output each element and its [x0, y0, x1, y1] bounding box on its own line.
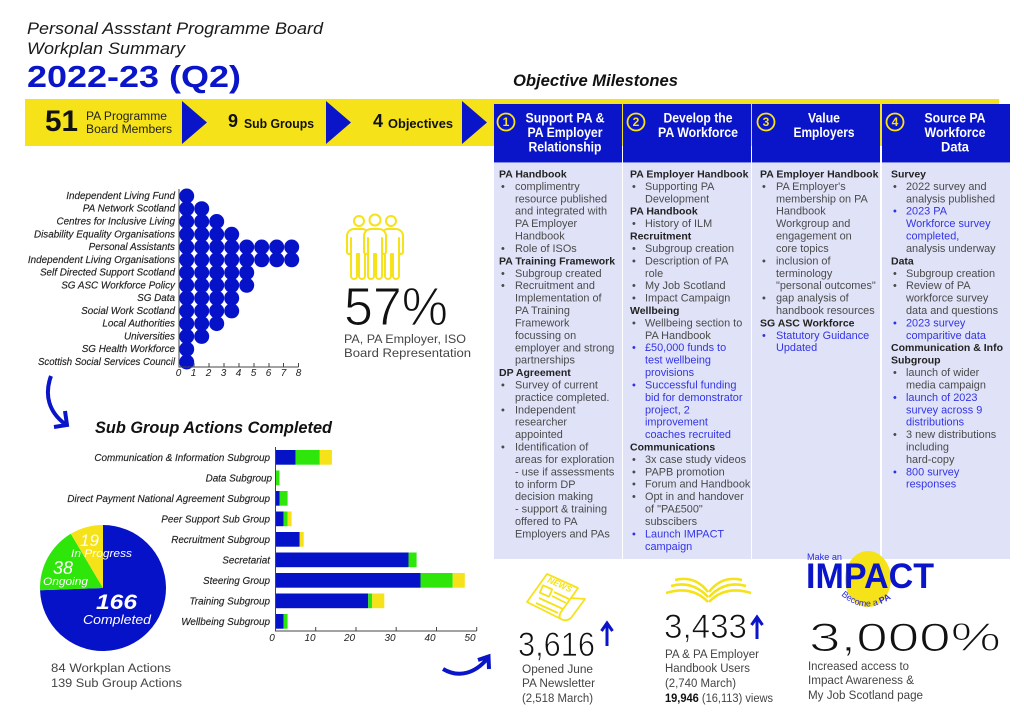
column 4 communication and info subgroup: hard-copy — [906, 454, 955, 466]
column 3 PA Employer Handbook: Workgroup and — [776, 218, 850, 230]
column 2 communications: • — [632, 454, 636, 466]
column 4 data: Data — [891, 255, 914, 267]
column 2 communications: • — [632, 491, 636, 503]
column 4 communication and info subgroup: Subgroup — [891, 355, 941, 367]
column 2 wellbeing: test wellbeing — [645, 355, 711, 367]
arrow: members to sub groups — [182, 101, 207, 144]
column 4 data: • — [893, 317, 897, 329]
dot chart axis: 3 — [221, 368, 227, 379]
column 2 handbooks and recruitment: Supporting PA — [645, 181, 715, 193]
column 3 PA Employer Handbook: • — [762, 293, 766, 305]
arrow: newsletter increase — [602, 623, 612, 646]
column 4 survey: Survey — [891, 168, 926, 180]
logo: make an impact: Become a PA — [842, 590, 891, 607]
column 4: source PA workforce data — [882, 104, 1010, 559]
column 2 handbooks and recruitment: role — [645, 268, 663, 280]
column 1 PA Training Framework: partnerships — [515, 355, 575, 367]
column 3 PA Employer Handbook: handbook resources — [776, 305, 875, 317]
icon: open book — [666, 579, 751, 602]
column 2 handbooks and recruitment: Recruitment — [630, 231, 692, 243]
column 2 wellbeing: Wellbeing section to — [645, 317, 742, 329]
objective milestones heading: Objective Milestones — [513, 72, 678, 90]
column 1 DP Agreement: offered to PA — [515, 516, 578, 528]
dot chart axis: 7 — [281, 368, 287, 379]
newsletter stat: Opened June — [522, 662, 593, 676]
column 2 communications: • — [632, 479, 636, 491]
column 2 handbooks and recruitment: Impact Campaign — [645, 293, 730, 305]
column 3 SG ASC Workforce: Updated — [776, 342, 817, 354]
column 4 data: Review of PA — [906, 280, 971, 292]
column 2 wellbeing: • — [632, 317, 636, 329]
board representation stat: 57% — [344, 277, 448, 337]
column 3 PA Employer Handbook: Handbook — [776, 206, 826, 218]
column 1 DP Agreement: practice completed. — [515, 392, 609, 404]
bar chart labels: Data Subgroup — [206, 473, 273, 484]
ongoing bars — [276, 450, 453, 629]
dot chart labels: Centres for Inclusive Living — [56, 216, 175, 228]
column 4 survey: 2023 PA — [906, 206, 948, 218]
board representation stat — [344, 277, 471, 360]
sub group actions heading: Sub Group Actions Completed — [95, 419, 333, 437]
column 2 header: 2 — [633, 115, 640, 129]
objectives stat: Objectives — [388, 116, 453, 131]
column 3 SG ASC Workforce: • — [762, 330, 766, 342]
dot chart labels: Personal Assistants — [89, 242, 175, 253]
board members stat — [45, 105, 172, 138]
column 2 handbooks and recruitment: • — [632, 243, 636, 255]
column 1 header: PA Employer — [528, 125, 603, 140]
impact stat: My Job Scotland page — [808, 688, 923, 702]
column 2 handbooks and recruitment: Development — [645, 193, 709, 205]
column 3 SG ASC Workforce: Statutory Guidance — [776, 330, 869, 342]
column 3: value employers — [752, 104, 880, 559]
bar chart labels: Wellbeing Subgroup — [181, 617, 270, 628]
column 3 PA Employer Handbook: inclusion of — [776, 255, 831, 267]
column 1 DP Agreement: Independent — [515, 404, 576, 416]
column 1 PA Training Framework: Recruitment and — [515, 280, 595, 292]
column 3 PA Employer Handbook: "personal outcomes" — [776, 280, 876, 292]
dot chart labels: SG Health Workforce — [82, 344, 176, 355]
bar chart labels: Steering Group — [203, 576, 270, 587]
column 2 handbooks and recruitment: PA Employer Handbook — [630, 168, 749, 180]
impact stat: 3,000% — [809, 616, 1001, 660]
column 1 DP Agreement: Survey of current — [515, 380, 598, 392]
dot chart labels: Universities — [124, 331, 175, 342]
column 4 survey: analysis published — [906, 193, 995, 205]
dot chart labels — [28, 191, 176, 368]
column 2 communications: 3x case study videos — [645, 454, 747, 466]
column 3 SG ASC Workforce: SG ASC Workforce — [760, 317, 855, 329]
column 4 data: workforce survey — [905, 293, 989, 305]
column 4 survey: analysis underway — [906, 243, 996, 255]
handbook stat — [664, 608, 773, 705]
column 2 communications: campaign — [645, 541, 692, 553]
column 4 survey: completed, — [906, 231, 959, 243]
column 3 header: 3 — [763, 115, 770, 129]
column 2 handbooks and recruitment: • — [632, 280, 636, 292]
column 1 PA Handbook: PA Handbook — [499, 168, 567, 180]
column 1 PA Handbook: Role of ISOs — [515, 243, 577, 255]
newsletter stat: 3,616 — [518, 626, 595, 664]
column 1 PA Training Framework: Subgroup created — [515, 268, 602, 280]
handbook stat: Handbook Users — [665, 661, 750, 675]
column 2 wellbeing: PA Handbook — [645, 330, 711, 342]
handbook stat: 19,946 (16,113) views — [665, 691, 773, 705]
bar chart labels — [67, 453, 273, 628]
in progress label: 19 — [80, 531, 99, 550]
dots — [179, 188, 299, 370]
ongoing label — [43, 558, 89, 588]
bar chart labels: Communication & Information Subgroup — [94, 453, 270, 464]
column 4 header: 4 — [892, 115, 899, 129]
arrow: objectives to milestones — [462, 101, 487, 144]
column 2 communications: of "PA£500" — [645, 504, 703, 516]
column 1 header: 1 — [503, 115, 510, 129]
column 4 communication and info subgroup: • — [893, 392, 897, 404]
dot chart axis: 1 — [191, 368, 196, 379]
column 4 communication and info subgroup: survey across 9 — [906, 404, 982, 416]
objectives stat — [373, 111, 453, 131]
column 4 communication and info subgroup: 800 survey — [906, 466, 960, 478]
objectives stat: 4 — [373, 111, 383, 131]
sub groups stat: Sub Groups — [244, 116, 314, 131]
column 4 data: 2023 survey — [906, 317, 966, 329]
dot chart labels: SG ASC Workforce Policy — [61, 280, 176, 291]
completed label: 166 — [96, 591, 137, 614]
column 2 wellbeing: Wellbeing — [630, 305, 679, 317]
column 2 communications: Forum and Handbook — [645, 479, 751, 491]
column 2 header — [623, 104, 751, 162]
column 1 header: Support PA & — [526, 110, 605, 126]
dot chart axis: 8 — [296, 368, 302, 379]
column 4 communication and info subgroup: • — [893, 466, 897, 478]
column 1 PA Handbook: Handbook — [515, 231, 565, 243]
column 1 PA Handbook: • — [501, 243, 505, 255]
column 1 DP Agreement: • — [501, 380, 505, 392]
column 2 handbooks and recruitment: • — [632, 255, 636, 267]
column 1 DP Agreement: to inform DP — [515, 479, 576, 491]
completed bars — [276, 450, 420, 629]
arrow: curved to headline stats — [443, 656, 489, 674]
dot chart axis: 2 — [205, 368, 212, 379]
column 4 survey: Workforce survey — [906, 218, 991, 230]
logo: make an impact: Make an — [807, 552, 842, 563]
column 3 PA Employer Handbook: core topics — [776, 243, 829, 255]
column 2 handbooks and recruitment: Subgroup creation — [645, 243, 734, 255]
column 1 PA Handbook: PA Employer — [515, 218, 578, 230]
icon: newspaper: NEWS — [546, 575, 574, 594]
ongoing label: Ongoing — [43, 576, 89, 588]
bar chart axis: 50 — [464, 633, 476, 644]
title: Workplan Summary — [27, 40, 186, 58]
column 4 data: data and questions — [906, 305, 999, 317]
dot chart: board membership — [28, 188, 302, 379]
column 1 DP Agreement: decision making — [515, 491, 593, 503]
column 4 communication and info subgroup: • — [893, 429, 897, 441]
dot chart axis: 6 — [266, 368, 272, 379]
action totals: 139 Sub Group Actions — [51, 676, 182, 690]
column 4 communication and info subgroup: • — [893, 367, 897, 379]
bar chart labels: Peer Support Sub Group — [161, 514, 270, 525]
column 1 DP Agreement: • — [501, 404, 505, 416]
dot chart labels: PA Network Scotland — [83, 204, 175, 215]
column 1 PA Training Framework: • — [501, 280, 505, 292]
completed label: Completed — [83, 612, 152, 627]
column 2 handbooks and recruitment: Description of PA — [645, 255, 729, 267]
column 2 header: Develop the — [664, 110, 732, 126]
board representation stat: Board Representation — [344, 346, 471, 360]
icon: three people — [347, 214, 403, 279]
column 4 survey: • — [893, 206, 897, 218]
column 3 PA Employer Handbook: PA Employer's — [776, 181, 846, 193]
column 2 communications: PAPB promotion — [645, 466, 725, 478]
bar chart axis: 30 — [384, 633, 396, 644]
column 2 wellbeing: Successful funding — [645, 379, 736, 391]
column 2 handbooks and recruitment: • — [632, 218, 636, 230]
bar chart labels: Direct Payment National Agreement Subgroup — [67, 494, 270, 505]
column 1 DP Agreement: areas for exploration — [515, 454, 614, 466]
dot chart labels: Local Authorities — [102, 319, 175, 330]
ongoing label: 38 — [53, 558, 73, 578]
arrow: handbook increase — [752, 617, 762, 639]
dot chart axis: 4 — [236, 368, 242, 379]
column 4 communication and info subgroup: launch of 2023 — [906, 392, 977, 404]
column 2: develop the PA workforce — [623, 104, 751, 559]
column 2 communications: Launch IMPACT — [645, 528, 724, 540]
in progress label — [71, 531, 133, 560]
column 4 communication and info subgroup: responses — [906, 479, 957, 491]
yellow summary band — [25, 99, 999, 146]
handbook stat: PA & PA Employer — [665, 647, 759, 661]
logo: make an impact — [806, 551, 934, 607]
column 2 handbooks and recruitment: PA Handbook — [630, 206, 698, 218]
column 1 header — [494, 104, 622, 162]
column 2 wellbeing: improvement — [645, 417, 708, 429]
column 1 PA Training Framework: PA Training Framework — [499, 255, 615, 267]
column 1 DP Agreement: Employers and PAs — [515, 528, 610, 540]
dot chart labels: Social Work Scotland — [81, 306, 175, 317]
bar chart axis: 20 — [343, 633, 355, 644]
board members stat: Board Members — [86, 124, 172, 136]
column 1 PA Training Framework: • — [501, 268, 505, 280]
column 2 handbooks and recruitment: • — [632, 293, 636, 305]
bar chart axis: 0 — [269, 633, 275, 644]
column 4 communication and info subgroup: distributions — [906, 417, 965, 429]
newsletter stat — [518, 623, 612, 705]
column 2 wellbeing: provisions — [645, 367, 695, 379]
column 1 DP Agreement: • — [501, 442, 505, 454]
column 1 PA Training Framework: PA Training — [515, 305, 570, 317]
column 4 communication and info subgroup: 3 new distributions — [906, 429, 997, 441]
column 3 PA Employer Handbook: • — [762, 255, 766, 267]
column 3 PA Employer Handbook: • — [762, 181, 766, 193]
column 2 communications: Communications — [630, 442, 715, 454]
dot chart labels: Disability Equality Organisations — [34, 229, 175, 240]
column 2 wellbeing: project, 2 — [645, 404, 690, 416]
column 4 data: • — [893, 268, 897, 280]
bar chart labels: Secretariat — [222, 555, 271, 566]
column 2 header: PA Workforce — [658, 125, 738, 140]
column 2 handbooks and recruitment: History of ILM — [645, 218, 712, 230]
sub groups stat — [228, 111, 314, 131]
column 1 DP Agreement: Identification of — [515, 442, 589, 454]
bar chart axis — [269, 447, 477, 644]
column 1 PA Training Framework: Implementation of — [515, 293, 603, 305]
dot chart labels: Scottish Social Services Council — [38, 357, 176, 368]
column 3 PA Employer Handbook: terminology — [776, 268, 833, 280]
board members stat: 51 — [45, 105, 78, 138]
column 1: support PA and employer relationship — [494, 104, 622, 559]
column 4 communication and info subgroup: launch of wider — [906, 367, 980, 379]
arrow: curved down to sub group actions — [48, 376, 67, 427]
column 3 header: Employers — [794, 125, 854, 140]
dot chart axis: 5 — [251, 368, 257, 379]
dot chart labels: Independent Living Fund — [66, 191, 176, 202]
action totals — [51, 661, 182, 690]
column 3 PA Employer Handbook: engagement on — [776, 231, 852, 243]
column 4 data: Subgroup creation — [906, 268, 995, 280]
column 1 DP Agreement: researcher — [515, 417, 567, 429]
column 4 communication and info subgroup: Communication & Info — [891, 342, 1003, 354]
icon: newspaper — [527, 574, 585, 620]
board members stat: PA Programme — [86, 111, 167, 123]
bar chart labels: Recruitment Subgroup — [171, 535, 270, 546]
column 1 DP Agreement: - support & training — [515, 504, 607, 516]
column 1 PA Handbook: complimentry — [515, 181, 580, 193]
column 1 PA Handbook: resource published — [515, 193, 607, 205]
column 2 communications: Opt in and handover — [645, 491, 744, 503]
column 1 DP Agreement: appointed — [515, 429, 563, 441]
bar chart: sub group actions — [67, 447, 477, 644]
column 2 handbooks and recruitment: • — [632, 181, 636, 193]
bar chart axis: 40 — [424, 633, 436, 644]
column 4 data: comparitive data — [906, 330, 987, 342]
column 4 header: Source PA — [924, 110, 986, 126]
column 2 communications: subscibers — [645, 516, 698, 528]
dot chart axis — [176, 189, 302, 379]
arrow: sub groups to objectives — [326, 101, 351, 144]
dot chart labels: SG Data — [137, 293, 176, 304]
column 1 PA Training Framework: Framework — [515, 317, 570, 329]
column 2 handbooks and recruitment: My Job Scotland — [645, 280, 726, 292]
column 2 wellbeing: • — [632, 379, 636, 391]
column 2 communications: • — [632, 466, 636, 478]
column 4 survey: 2022 survey and — [906, 181, 987, 193]
column 1 PA Training Framework: focussing on — [515, 330, 576, 342]
column 2 wellbeing: £50,000 funds to — [645, 342, 726, 354]
bar chart axis: 10 — [304, 633, 316, 644]
column 4 header: Workforce — [924, 125, 986, 140]
column 4 survey: • — [893, 181, 897, 193]
sub groups stat: 9 — [228, 111, 238, 131]
column 4 communication and info subgroup: including — [906, 441, 949, 453]
logo: make an impact: IMPACT — [806, 557, 934, 596]
impact stat: Increased access to — [808, 659, 909, 673]
pie chart: action status — [40, 525, 166, 651]
impact stat: Impact Awareness & — [808, 673, 915, 687]
title — [27, 20, 324, 94]
action totals: 84 Workplan Actions — [51, 661, 171, 675]
dot chart labels: Self Directed Support Scotland — [40, 268, 175, 279]
newsletter stat: (2,518 March) — [522, 691, 593, 705]
title: 2022-23 (Q2) — [27, 59, 241, 94]
column 1 DP Agreement: DP Agreement — [499, 367, 571, 379]
board representation stat: PA, PA Employer, ISO — [344, 332, 466, 346]
column 1 PA Training Framework: employer and strong — [515, 342, 614, 354]
in progress bars — [288, 450, 465, 608]
column 1 header: Relationship — [528, 140, 602, 154]
column 1 DP Agreement: - use if assessments — [515, 466, 615, 478]
column 3 PA Employer Handbook: gap analysis of — [776, 293, 850, 305]
newsletter stat: PA Newsletter — [522, 676, 595, 690]
dot chart axis: 0 — [176, 368, 182, 379]
column 4 header: Data — [941, 140, 970, 154]
bar chart labels: Training Subgroup — [189, 596, 271, 607]
column 3 header — [752, 104, 880, 162]
dot chart labels: Independent Living Organisations — [28, 255, 175, 266]
handbook stat: (2,740 March) — [665, 676, 736, 690]
impact stat — [808, 616, 1001, 702]
handbook stat: 3,433 — [664, 608, 747, 646]
column 3 PA Employer Handbook: membership on PA — [776, 193, 869, 205]
column 2 wellbeing: bid for demonstrator — [645, 392, 743, 404]
column 3 header: Value — [808, 110, 840, 126]
in progress label: In Progress — [71, 548, 133, 560]
column 1 PA Handbook: and integrated with — [515, 206, 607, 218]
column 3 PA Employer Handbook: PA Employer Handbook — [760, 168, 879, 180]
column 2 wellbeing: • — [632, 342, 636, 354]
title: Personal Assstant Programme Board — [27, 20, 324, 38]
column 2 wellbeing: coaches recruited — [645, 429, 731, 441]
column 2 communications: • — [632, 528, 636, 540]
column 4 header — [882, 104, 1010, 162]
column 4 communication and info subgroup: media campaign — [906, 379, 986, 391]
column 4 data: • — [893, 280, 897, 292]
column 1 PA Handbook: • — [501, 181, 505, 193]
completed label — [83, 591, 152, 627]
